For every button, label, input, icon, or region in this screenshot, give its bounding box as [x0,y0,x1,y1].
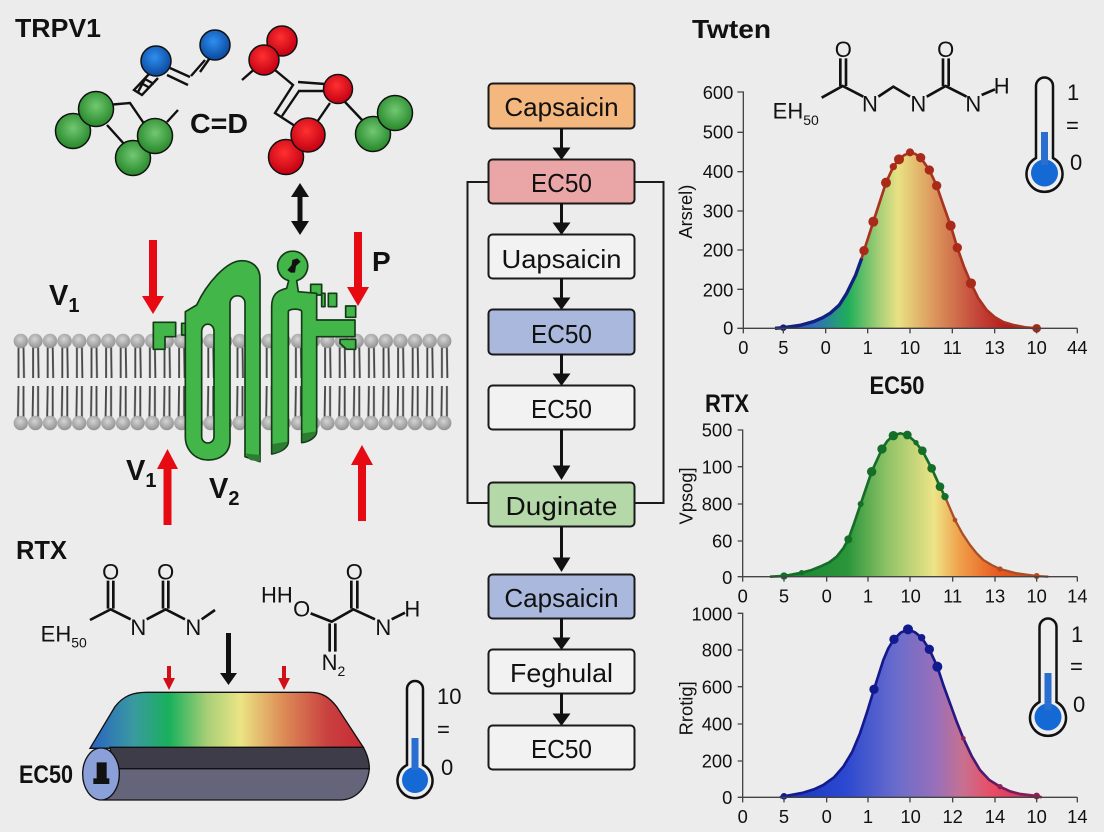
node: EC50 pink [488,160,634,204]
x tick labels: 10 [1026,585,1047,606]
node: Feghulal: Feghulal [510,658,613,688]
red arrow small left [163,666,175,690]
bonds [107,55,363,145]
lower leaflet [14,385,452,431]
node: EC50 bottom: EC50 [531,734,592,764]
molecule: top right: N [910,92,926,117]
arrow [554,527,570,571]
red arrow: lower right [351,445,373,521]
line chart: Twten [675,82,1088,358]
TRPV1 protein channel [153,251,356,462]
x tick labels: 0 [738,337,748,358]
y tick labels: 200 [702,751,732,772]
heading: EC50 right: EC50 [870,372,924,400]
molecule: top right: EH [773,98,803,123]
transmembrane helices 1-2 [185,261,260,462]
node: EC50 white [488,386,634,430]
node: Feghulal [488,650,634,694]
molecule: left structure: EH [41,622,71,647]
fragment blocks [153,322,176,349]
y axis title: Arsrel) [675,185,696,239]
molecule: top right: N [862,92,878,117]
molecule: left structure: N [185,615,201,640]
orange curve segment [945,497,1048,577]
y tick labels: 600 [703,82,733,103]
y tick labels: 0 [723,318,733,339]
arrow [554,203,570,234]
x tick labels: 5 [778,337,788,358]
blue curve segment [775,258,862,328]
axes [738,613,1077,802]
thermometer: lower left: 10 [437,684,461,709]
x tick labels: 13 [985,585,1005,606]
data points [780,431,949,580]
green atoms, right [356,96,412,152]
molecule: left structure: O [102,559,119,584]
tube top face [90,692,363,748]
label: V1 upper: 1 [68,295,79,317]
x tick labels: 1 [863,337,873,358]
node: Uapsaicin [488,234,634,278]
node: EC50 blue: EC50 [531,319,592,349]
x tick labels: 1 [863,585,873,606]
x tick labels: 13 [984,337,1005,358]
molecule: top right: O [835,37,852,62]
x tick labels: 5 [779,806,789,827]
x tick labels: 44 [1067,337,1088,358]
node: Duginate green [488,482,634,526]
x tick labels: 10 [900,806,921,827]
x tick labels: 10 [900,585,921,606]
y tick labels [702,420,732,588]
node: EC50 white: EC50 [531,394,592,424]
binding site mark [287,258,301,273]
node: EC50 blue [488,310,634,354]
x tick labels: 10 [1026,337,1047,358]
tube end cap [83,748,119,800]
y tick labels: 600 [702,676,732,697]
x tick labels: 14 [1067,585,1088,606]
node: Capsaicin orange [488,84,634,128]
heading: RTX right: RTX [705,390,749,418]
thermometer: lower right [1030,618,1085,736]
heading: TRPV1: TRPV1 [15,13,101,43]
red arrow: lower left [157,449,178,525]
x tick labels: 10 [900,337,920,358]
label: P: P [372,246,391,277]
y tick labels: 60 [712,531,732,552]
membrane bilayer [14,333,452,431]
y tick labels: 1000 [692,604,732,625]
molecule: right structure: HH [261,583,293,608]
area under curve [780,629,1042,797]
label: V2: V [209,473,228,505]
thermometer: lower right: = [1070,654,1083,679]
helix shadows [245,453,260,462]
y tick labels: 400 [702,714,732,735]
node: EC50 bottom [488,726,634,770]
thermometer: lower right: 1 [1071,622,1083,647]
red arrow: upper right [347,232,369,306]
y tick labels: 0 [722,787,732,808]
x tick labels: 14 [1067,806,1088,827]
green curve segment [770,433,945,577]
molecule: top right: 50 [803,112,819,128]
x tick labels: 0 [821,337,831,358]
molecule: right structure: N [375,615,391,640]
y tick labels: 800 [702,493,732,514]
red arrow small right [278,666,290,690]
tube dark band [110,747,369,769]
curve [780,629,1042,797]
line chart: Vpsog [676,420,1088,606]
feedback loop [468,182,664,503]
y tick labels: 400 [703,161,733,182]
heading: Twten: Twten [692,14,771,44]
line chart: Rrotig [676,604,1088,827]
y tick labels: 100 [702,456,732,477]
y tick labels: 200 [703,279,733,300]
label: EC50 tube: EC50 [19,761,73,789]
axes [737,92,1077,333]
heading: RTX lower left: RTX [16,535,68,565]
molecule diagram: top left ball-and-stick [56,26,412,176]
area under curve [775,152,1037,328]
x tick labels: 0 [822,806,832,827]
x tick labels: 11 [943,585,962,606]
transmembrane helices 3-4 with arm [272,251,355,454]
tube lower band [103,769,369,800]
molecule: left structure: N [130,615,146,640]
molecule: top right: O [937,37,954,62]
node: Capsaicin blue [488,574,634,618]
thermometer: lower left [398,681,461,798]
molecule: left structure: 50 [71,635,87,651]
molecule: right structure: H [404,597,420,622]
node: EC50 pink: EC50 [531,168,592,198]
y tick labels: 200 [703,239,733,260]
node: Uapsaicin: Uapsaicin [502,244,622,274]
black arrow to tube [220,633,237,685]
x tick labels [738,806,1088,827]
molecule: right structure: N [322,650,338,675]
label: V1 upper: V [49,280,68,312]
arrow [554,618,570,649]
thermometer: top right: 0 [1070,150,1082,175]
axes [738,430,1077,582]
node: Capsaicin blue: Capsaicin [504,583,619,613]
x tick labels: 10 [1026,806,1047,827]
y tick labels: 0 [722,567,732,588]
thermometer: lower right: 0 [1073,692,1085,717]
x tick labels: 0 [738,585,748,606]
green atoms, left [56,92,172,176]
molecule: top right: N [965,92,981,117]
x tick labels: 12 [942,806,963,827]
y tick labels: 800 [702,640,732,661]
blue atoms [141,30,230,76]
thermometer: top right: 1 [1067,80,1079,105]
upper leaflet [14,333,452,379]
data points [859,148,1041,333]
y axis title: Rrotig] [676,681,697,735]
molecule: right structure [261,559,420,679]
x tick labels: 0 [822,585,832,606]
double-headed arrow [291,183,309,235]
label: V1 lower: V [126,455,145,487]
red atoms [249,26,352,174]
arrow [554,354,570,385]
x tick labels: 5 [779,585,789,606]
y axis title: Vpsog] [676,467,697,525]
node: Capsaicin orange: Capsaicin [504,92,619,122]
thermometer: lower left: 0 [441,755,453,780]
node: Duginate green: Duginate [506,491,618,521]
x tick labels [738,337,1088,358]
x tick labels: 1 [863,806,873,827]
molecule: right structure: 2 [338,663,346,679]
arrow [554,693,570,725]
arrow [554,278,570,309]
arrow [554,430,570,479]
flowchart [468,84,664,770]
area under curve [770,433,1048,577]
thermometer: top right [1026,78,1082,192]
y tick labels: 500 [703,122,733,143]
x tick labels: 0 [738,806,748,827]
molecule: top right [773,37,1010,128]
thermometer: top right: = [1066,113,1079,138]
red arrow: upper left [142,240,164,314]
y tick labels: 500 [702,420,732,441]
data points [781,624,942,800]
thermometer: lower left: = [437,717,450,742]
label: V2: 2 [228,488,239,510]
x tick labels [738,585,1088,606]
y tick labels [692,604,732,808]
y tick labels [703,82,733,339]
label: V1 lower: 1 [145,470,156,492]
gradient tube [83,692,369,800]
molecule: left structure [41,559,215,651]
molecule: top right: H [994,73,1010,98]
molecule: right structure: O [346,559,363,584]
x tick labels: 14 [985,806,1005,827]
molecule: right structure: O [293,596,310,621]
y tick labels: 300 [703,200,733,221]
red curve segment [862,152,1037,328]
x tick labels: 11 [943,337,962,358]
label: C=D: C=D [190,108,248,139]
molecule: left structure: O [157,559,174,584]
arrow [554,128,570,159]
